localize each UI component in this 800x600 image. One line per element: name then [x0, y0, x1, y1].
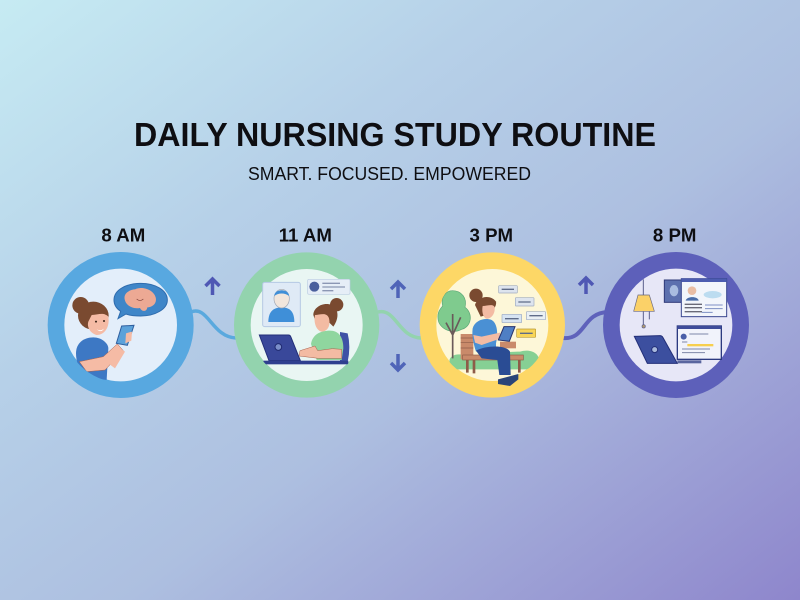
icon: video call window [664, 280, 684, 302]
illustration: woman at laptop [259, 298, 349, 364]
ring and background [611, 260, 741, 390]
arrow: up after 8 AM [206, 279, 220, 295]
connector: 11 AM to 3 PM [378, 312, 421, 338]
illustration: woman with tablet [469, 289, 518, 386]
ring and background [242, 261, 371, 389]
title: DAILY NURSING STUDY ROUTINE [134, 116, 656, 153]
icon: patient record card [681, 279, 727, 317]
icon: small info card [308, 279, 350, 294]
arrow: up after 3 PM [579, 278, 593, 294]
connector: 3 PM to 8 PM [563, 312, 608, 338]
icon: floating message cards [499, 286, 546, 337]
icon: hanging lamp [634, 279, 654, 328]
time label: 8 AM: 8 AM [101, 225, 145, 246]
illustration: woman with phone [72, 297, 134, 380]
step: 8 AM [56, 225, 185, 390]
icon: laptop with results screen [634, 326, 721, 363]
icon: profile card [263, 282, 300, 327]
step: 3 PM [428, 225, 557, 389]
ring and background [428, 261, 557, 389]
time label: 8 PM: 8 PM [653, 225, 696, 246]
step: 8 PM [611, 225, 741, 390]
time label: 3 PM: 3 PM [470, 225, 513, 246]
ring and background [56, 260, 185, 390]
subtitle: SMART. FOCUSED. EMPOWERED [248, 164, 531, 184]
time label: 11 AM: 11 AM [279, 225, 332, 246]
illustration: tree and bushes [438, 291, 539, 369]
icon: speech bubble with brain [114, 283, 167, 319]
connector: 8 AM to 11 AM [191, 311, 236, 338]
step: 11 AM [242, 225, 371, 389]
illustration: bench [461, 334, 523, 373]
arrow: down after 11 AM [391, 354, 405, 370]
arrow: up after 11 AM [391, 282, 405, 298]
